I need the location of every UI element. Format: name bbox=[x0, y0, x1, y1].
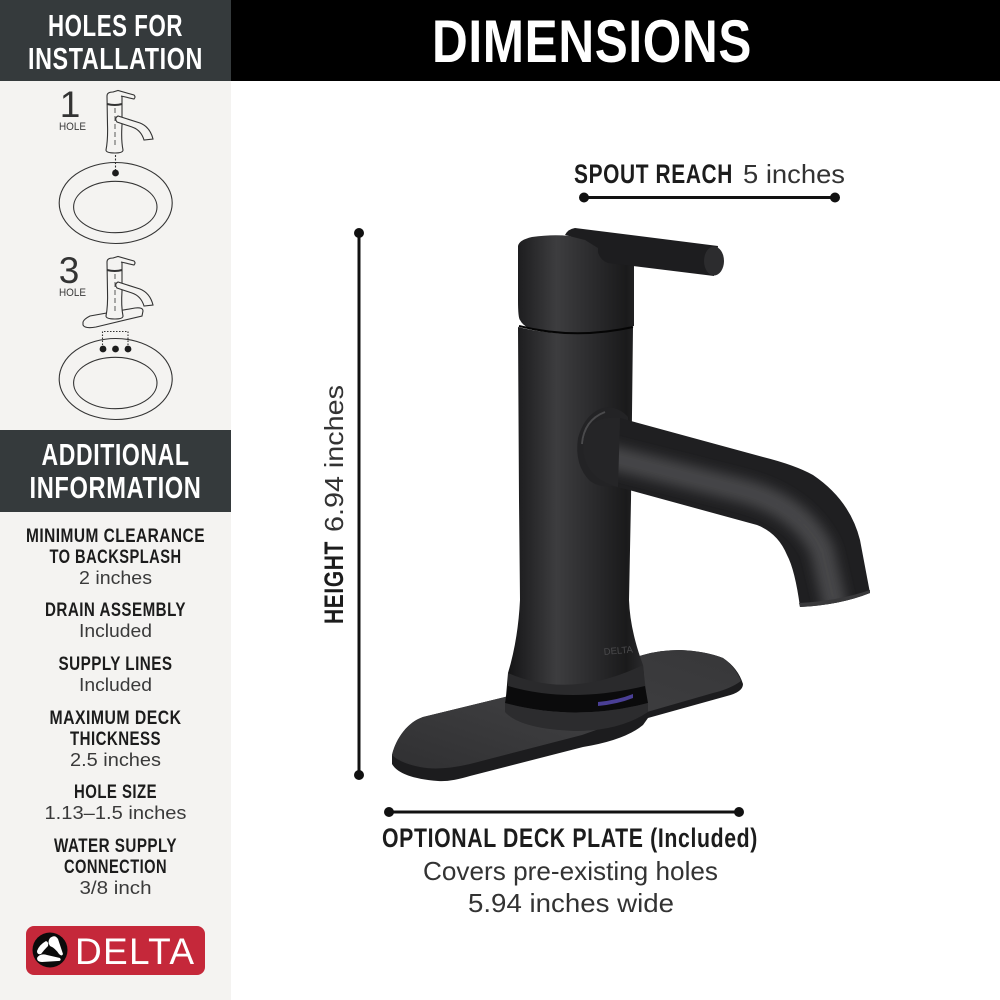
panel: left sidebar background bbox=[0, 0, 231, 1000]
icon: one hole installation: HOLE bbox=[59, 121, 86, 133]
text block: additional information list: 2.5 inches bbox=[70, 750, 161, 770]
text block: additional information list: DRAIN ASSEMBLY bbox=[45, 599, 186, 621]
panel: dimensions header bar bbox=[231, 0, 1000, 81]
text block: additional information list: CONNECTION bbox=[64, 856, 167, 878]
heading: additional information: INFORMATION bbox=[30, 470, 202, 505]
dimension: height bbox=[319, 228, 364, 780]
heading: holes for installation bbox=[0, 0, 231, 81]
dimension: deck plate bbox=[382, 807, 758, 918]
icon: three hole installation: 3 bbox=[59, 250, 79, 291]
seam line bbox=[519, 326, 633, 333]
text block: additional information list bbox=[26, 525, 205, 898]
dimension: spout reach bbox=[574, 159, 845, 202]
cap bbox=[518, 235, 634, 334]
text block: additional information list: MAXIMUM DECK bbox=[50, 707, 182, 729]
logo mark on body: DELTA bbox=[603, 644, 634, 658]
handle lever bbox=[565, 228, 724, 276]
text block: additional information list: MINIMUM CLEARANCE bbox=[26, 525, 205, 547]
text block: additional information list: 3/8 inch bbox=[80, 878, 152, 898]
spout bbox=[577, 407, 870, 610]
dimension: deck plate: Covers pre-existing holes bbox=[423, 856, 718, 886]
dimension: deck plate: 5.94 inches wide bbox=[468, 888, 674, 918]
dimension: spout reach: SPOUT REACH bbox=[574, 159, 733, 189]
text block: additional information list: SUPPLY LINES bbox=[58, 653, 172, 675]
text block: additional information list: WATER SUPPLY bbox=[54, 835, 177, 857]
text block: additional information list: TO BACKSPLASH bbox=[50, 546, 182, 568]
icon: one hole installation: 1 bbox=[60, 84, 80, 125]
icon: three hole installation: HOLE bbox=[59, 287, 86, 299]
dimension: deck plate: OPTIONAL DECK PLATE (Included) bbox=[382, 823, 758, 853]
dimension: height: HEIGHT bbox=[319, 541, 349, 624]
text block: additional information list: Included bbox=[79, 621, 152, 641]
text block: additional information list: 1.13–1.5 inches bbox=[44, 803, 186, 823]
text block: additional information list: 2 inches bbox=[79, 568, 152, 588]
base collar bbox=[505, 644, 648, 731]
text block: additional information list: HOLE SIZE bbox=[74, 781, 157, 803]
icon: three hole installation bbox=[59, 250, 172, 420]
deck plate bbox=[392, 650, 743, 781]
faucet body bbox=[505, 327, 648, 731]
logo: delta: DELTA bbox=[75, 931, 194, 972]
title: dimensions: DIMENSIONS bbox=[432, 8, 752, 75]
text block: additional information list: THICKNESS bbox=[70, 728, 161, 750]
dimension: spout reach: 5 inches bbox=[743, 159, 845, 189]
dimension: height: 6.94 inches bbox=[319, 385, 349, 532]
heading: holes for installation: HOLES FOR bbox=[48, 8, 183, 43]
text block: additional information list: Included bbox=[79, 675, 152, 695]
illustration: black faucet bbox=[392, 228, 870, 781]
heading: additional information bbox=[0, 430, 231, 512]
heading: additional information: ADDITIONAL bbox=[42, 437, 190, 472]
icon: one hole installation bbox=[59, 84, 172, 244]
logo: delta bbox=[26, 926, 205, 975]
heading: holes for installation: INSTALLATION bbox=[28, 41, 203, 76]
